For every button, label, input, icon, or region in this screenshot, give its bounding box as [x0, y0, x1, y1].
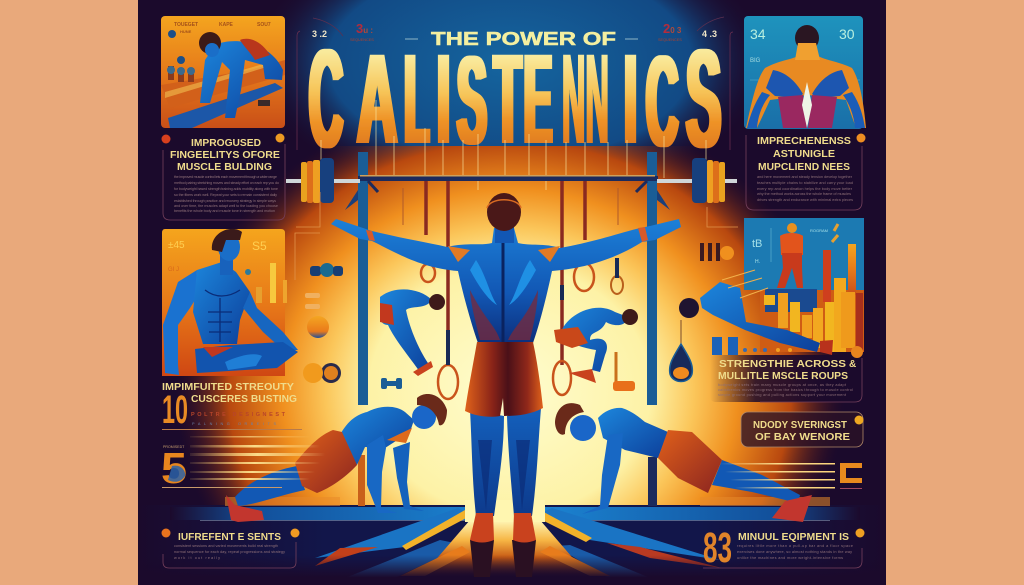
- headline: IMPROGUSED: [191, 138, 261, 149]
- lats: [766, 70, 849, 98]
- image card with chart: [712, 218, 864, 355]
- outline: [760, 358, 862, 402]
- figure: right push-up: [555, 403, 812, 522]
- body text: [718, 383, 853, 397]
- image card: BIG: [750, 58, 761, 64]
- body text: established through practice and recovery strategy in simple ways: [174, 199, 276, 203]
- body text: every rep and coordination helps the body move better: [757, 187, 853, 191]
- sub labels: POLTRE DESIGNEST: [191, 412, 286, 418]
- headline: IMPIMFUITED STREOUTY: [162, 382, 294, 393]
- shoulders: [746, 56, 866, 128]
- headline: STRENGTHIE ACROSS: [719, 359, 846, 370]
- body text: drives strength and endurance with minimal extra pieces: [757, 198, 853, 202]
- body text: simple ground pushing and pulling actions support your movement: [718, 393, 847, 397]
- image card: 34: [750, 26, 766, 42]
- heading: calistenics letters: N: [586, 28, 609, 170]
- leg: [235, 466, 305, 506]
- spine: [802, 82, 812, 128]
- legs: [470, 408, 541, 516]
- top stat left: 3.2: [297, 18, 343, 150]
- top stat right: 4.3: 4 .3: [702, 29, 717, 39]
- icon: pills: [305, 293, 320, 309]
- image card: [162, 229, 298, 376]
- panel: minimal equipment: unlike the machines and more weight-intensive forms: [737, 556, 843, 560]
- panel: minimal equipment: requires little more than a pull-up bar and a floor space: [737, 544, 853, 548]
- panel: strength across muscle groups: &: [849, 359, 856, 370]
- panel: strength across muscle groups: MULLITLE MSCLE ROUPS: [718, 371, 848, 382]
- top stat right: 2.3: [658, 21, 682, 42]
- panel: improved strength and seated figure: CUSCERES BUSTING: [191, 394, 297, 405]
- left stripes with number 5: 5: [161, 444, 187, 493]
- body text: and here movement and steady tension develop together: [757, 175, 853, 179]
- torso and arms: [331, 219, 681, 343]
- top stat right: 2.3: 20 3: [663, 21, 682, 36]
- panel: different sets: work it out really: [174, 556, 220, 560]
- pushing figure: [679, 270, 833, 355]
- body text: and over time, the muscles adapt well to the loading you choose: [174, 204, 278, 208]
- right stripes with icon: [720, 463, 862, 489]
- panel: improved strength and seated figure: [162, 229, 298, 432]
- shorts: [465, 342, 543, 417]
- number 10: 10: [162, 388, 188, 432]
- heading: calistenics letters: A: [357, 28, 397, 170]
- body text: [757, 175, 853, 202]
- torso: [193, 262, 250, 344]
- blue title glow: [250, 0, 770, 202]
- panel: back muscles: ASTUNIGLE: [773, 149, 835, 160]
- shorts: [203, 347, 233, 357]
- panel: improved flexibility: [161, 16, 285, 220]
- icon: orange balls: [303, 316, 341, 383]
- outline: [163, 144, 285, 220]
- image card: TOUEGET: [174, 22, 198, 28]
- leg: [712, 460, 800, 503]
- body text: teaches multiple chains to stabilize and carry your load: [757, 181, 853, 185]
- shorts: [658, 430, 722, 493]
- image card with chart: tB: [752, 238, 762, 250]
- image card with chart: ROGRAM: [810, 228, 828, 233]
- heading: calistenics letters: T: [494, 28, 521, 171]
- icon: left dumbbell: [310, 263, 343, 277]
- panel: minimal equipment: 83: [703, 524, 732, 572]
- heading: the power of: THE POWER OF: [431, 28, 616, 49]
- heading: calistenics letters: N: [562, 28, 585, 170]
- image card: [161, 16, 285, 128]
- image card: KAPE: [219, 22, 234, 28]
- head: [495, 225, 514, 243]
- left stripes with number 5: [161, 429, 325, 493]
- panel: back muscles: [744, 16, 866, 210]
- heading: calistenics letters: [309, 20, 721, 178]
- shorts: [295, 430, 357, 493]
- head: [412, 405, 436, 429]
- figure: left push-up: [226, 394, 447, 522]
- top stat left: 3.2: 3 .2: [312, 29, 327, 39]
- body text: benefits the whole body and muscle tone in strength and motion: [174, 209, 275, 213]
- torso: [340, 407, 414, 465]
- body text: why the method works across the whole frame of muscles: [757, 192, 851, 196]
- heading: calistenics letters: S: [686, 20, 721, 177]
- floor: [138, 497, 886, 585]
- heading: calistenics letters: L: [404, 28, 429, 171]
- vest accent: [387, 428, 412, 443]
- ball: [851, 346, 863, 358]
- icon: orange roller: [613, 352, 635, 391]
- image card: S5: [252, 239, 267, 253]
- icon: handle ring with ball: [670, 344, 692, 382]
- heading: calistenics letters: I: [438, 29, 450, 171]
- far arm: [393, 442, 424, 511]
- text box background: [710, 355, 862, 402]
- heading: calistenics letters: E: [524, 29, 552, 171]
- small figure: left folded: [380, 289, 445, 376]
- panel: minimal equipment: [703, 524, 864, 572]
- panel: minimal equipment: exercises done anywhere, so almost nothing stands in the way: [737, 550, 852, 554]
- body text: the improved muscle control lets each movement through a wider range: [174, 175, 277, 179]
- foot: [226, 495, 264, 522]
- headline: IMPRECHENENSS: [757, 136, 851, 147]
- left stripes with number 5: PROMISEDT: [163, 445, 185, 449]
- right arm: [243, 292, 298, 350]
- image card: HUNE: [180, 29, 192, 34]
- top stat right: 2.3: SEQUENCES: [658, 38, 682, 42]
- image card: [744, 16, 866, 129]
- body text: calisthenics moves progress from the basics through to muscle control: [718, 388, 853, 392]
- head: [220, 255, 233, 275]
- image card: ±45: [168, 240, 185, 251]
- main figure from behind: [331, 193, 681, 577]
- shoe shadows: [470, 540, 536, 577]
- panel: strength across muscle groups: [679, 218, 864, 402]
- heading: calistenics letters: C: [646, 28, 678, 174]
- lower back: [778, 95, 837, 128]
- body text: so the fibers work well. Repeat your sets to remain consistent daily: [174, 193, 277, 197]
- heading: calistenics letters: C: [309, 21, 343, 178]
- panel: body strength callout: NDODY SVERINGST: [753, 420, 847, 431]
- panel: improved flexibility: MUSCLE BULDING: [177, 162, 272, 173]
- top stat left: 3u: [350, 21, 374, 42]
- body text: bodyweight sets train many muscle groups at once, as they adapt: [718, 383, 847, 387]
- foot: [772, 495, 812, 522]
- arm: [582, 433, 623, 514]
- barbell: [286, 158, 737, 203]
- top stat left: 3u: 3u :: [356, 21, 373, 36]
- dark poster panel: [138, 0, 886, 585]
- panel: improved flexibility: FINGEELITYS OFORE: [170, 150, 280, 161]
- icon: small dumbbell centre: [381, 378, 402, 389]
- heading: calistenics letters: S: [457, 32, 487, 172]
- thin lines from title to bar: [321, 100, 706, 190]
- panel: different sets: consistent sessions and varied movements build real strength: [174, 544, 278, 548]
- central orange and yellow glow: [175, 146, 855, 510]
- panel: body strength callout: [741, 412, 864, 447]
- legs: [195, 342, 298, 373]
- body text: [174, 175, 279, 213]
- panel: different sets: normal sequence for each day, repeat progressions and strategy: [174, 550, 285, 554]
- panel: different sets: [162, 528, 300, 568]
- outer arms: [747, 92, 865, 128]
- top stat left: 3u: SEQUENCES: [350, 38, 374, 42]
- heading: calistenics letters: I: [624, 29, 637, 171]
- pull-up frame: [345, 152, 670, 506]
- connector lines: [295, 192, 738, 280]
- top stat right: 4.3: [697, 17, 733, 150]
- hanging straps and rings: [403, 181, 681, 399]
- left arm: [163, 270, 197, 375]
- panel: minimal equipment: MINUUL EQIPMENT IS: [738, 532, 849, 543]
- icon: right dumbbells and ball: [700, 243, 734, 261]
- head: [570, 415, 596, 441]
- panel: different sets: IUFREFENT E SENTS: [178, 532, 281, 543]
- image card: 30: [839, 26, 855, 42]
- image card: SOU7: [257, 22, 271, 28]
- panel: back muscles: MUPCLIEND NEES: [758, 162, 850, 173]
- panel: improved strength and seated figure: PALNING ORBEITS: [192, 422, 276, 426]
- small figure: right tucked: [554, 308, 638, 383]
- dot: [856, 134, 866, 142]
- panel: body strength callout: OF BAY WENORE: [755, 432, 850, 443]
- body text: method pairing stretching moves and steady effort on each rep you do: [174, 181, 279, 185]
- shoes: [470, 513, 536, 542]
- image card with chart: H.: [755, 259, 760, 265]
- image card: GI J: [168, 267, 179, 273]
- body text: for bodyweight based strength training adds mobility along with tone: [174, 187, 278, 191]
- outline: [746, 135, 862, 210]
- torso: [598, 408, 668, 458]
- dots: [162, 134, 170, 144]
- near arm: [367, 435, 397, 513]
